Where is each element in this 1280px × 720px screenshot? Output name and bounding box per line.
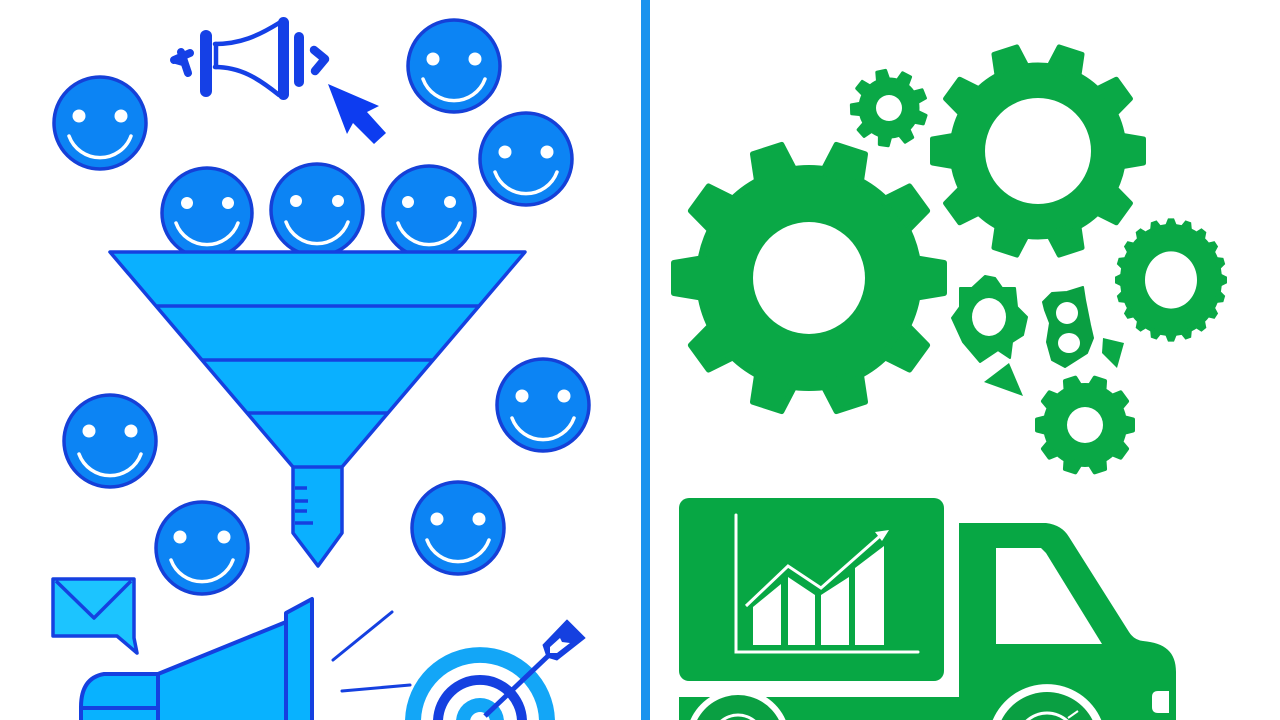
icon: email bubble (53, 579, 137, 653)
sound lines (333, 612, 410, 691)
icon: smiley 8 (497, 359, 589, 451)
icon: bottom gear (1037, 377, 1133, 473)
truck window (996, 548, 1102, 644)
right wheel (993, 684, 1101, 720)
icon: middle teardrop gear (952, 276, 1027, 362)
panel: marketing (53, 17, 589, 720)
icon: triangle shard left (984, 363, 1023, 396)
icon: right serrated gear (1115, 218, 1227, 342)
icon: large gear (674, 143, 944, 413)
icon: smiley 2 (408, 20, 500, 112)
icon: smiley 9 (156, 502, 248, 594)
icon: delivery truck (679, 498, 1176, 720)
chart on truck (736, 515, 918, 652)
icon: funnel (110, 252, 525, 566)
icon: smiley 6 (383, 166, 475, 258)
icon: target with arrow (405, 620, 585, 720)
left wheel (690, 689, 786, 720)
icon: small gear (851, 70, 927, 146)
icon: large megaphone (81, 599, 312, 720)
icon: cursor arrow (328, 84, 386, 144)
icon: upper gear (932, 46, 1144, 256)
truck headlight (1152, 691, 1169, 713)
icon: smiley 4 (162, 168, 252, 258)
icon: top megaphone (174, 17, 325, 100)
icon: triangle shard right (1102, 338, 1124, 368)
icon: figure-eight gear (1043, 287, 1093, 367)
icon: smiley 3 (480, 113, 572, 205)
icon: smiley 5 (271, 164, 363, 256)
divider (641, 0, 650, 720)
truck cargo box (679, 498, 944, 681)
truck cab and chassis (679, 523, 1176, 720)
icon: smiley 10 (412, 482, 504, 574)
icon: smiley 1 (54, 77, 146, 169)
icon: smiley 7 (64, 395, 156, 487)
panel: operations (674, 46, 1227, 720)
